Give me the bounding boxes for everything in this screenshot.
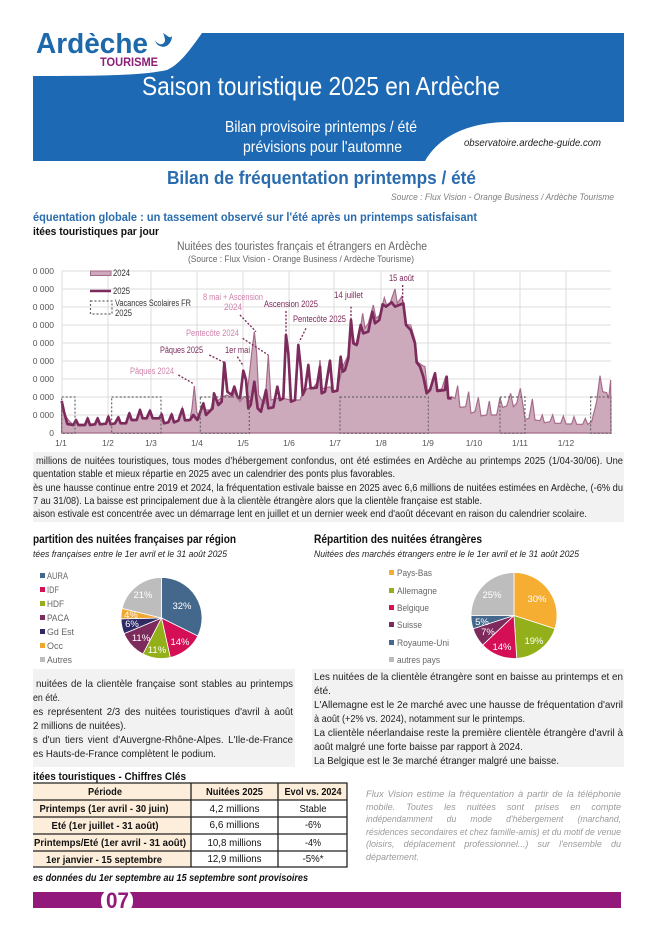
methodology note: (loisirs, déplacement professionnel...) sur l'ensemble du [366,839,622,850]
annotations: 8 mai + Ascension [203,292,263,302]
y axis labels: 40 000 [28,392,54,402]
chart legend: Vacances Scolaires FR [115,298,191,308]
x axis labels: 1/9 [422,438,434,448]
table: key figures: 1er janvier - 15 septembre [46,854,162,866]
website address: observatoire.ardeche-guide.com [464,137,601,149]
pie chart: foreign markets: 30% [527,594,547,605]
heading: partition des nuitées françaises par région [33,534,236,546]
panel: French clientele commentary: 2 millions de nuitées). [33,720,126,732]
chart legend: 2025 [113,286,130,296]
x axis labels: 1/12 [558,438,575,448]
table footnote: es données du 1er septembre au 15 septembre sont provisoires [33,873,308,884]
panel: foreign clientele commentary: été. [314,685,331,697]
table: key figures: Evol vs. 2024 [284,786,342,798]
legend: IDF [47,585,59,596]
heading: chiffres clés: itées touristiques - Chiffres Clés [33,771,186,783]
panel: foreign clientele commentary: L'Allemagne est le 2e marché avec une hausse de fréquentation d'avril [314,699,623,711]
annotations: Pentecôte 2024 [186,328,239,338]
methodology note: Flux Vision estime la fréquentation à partir de la téléphonie [366,789,621,800]
table: key figures: 12,9 millions [208,853,262,865]
footer bar with department number [33,892,621,908]
x axis labels: 1/5 [237,438,249,448]
panel: foreign clientele commentary: à août (+2% vs. 2024), notamment sur le printemps. [314,713,525,725]
legend: Allemagne [397,586,437,597]
pie chart: foreign markets: 25% [482,590,502,601]
panel: French clientele commentary: nuitées de la clientèle française sont stables au printemps [36,678,293,690]
x axis labels: 1/7 [329,438,341,448]
table: key figures: 6,6 millions [210,819,260,831]
line: 2025 [62,302,452,425]
methodology note [366,789,622,863]
legend [389,568,449,666]
annotations: Pâques 2025 [160,345,203,355]
chart subtitle: (Source : Flux Vision - Orange Business / Ardèche Tourisme) [188,254,414,264]
y axis labels: 0 [49,428,54,438]
table: key figures: -6% [305,819,321,831]
legend: Royaume-Uni [397,638,449,649]
logo: Ardèche Tourisme [36,33,172,66]
methodology note: résidences secondaires et chez famille-amis) et du motif de venue [366,827,621,838]
chart legend: 2024 [113,268,130,278]
panel: French clientele commentary: en été. [33,692,60,704]
legend: Autres [47,655,72,666]
table: key figures: -5%* [302,853,324,865]
y axis labels: 100 000 [23,338,54,348]
subtitle [225,119,417,156]
chart title: Nuitées des touristes français et étrangers en Ardèche [177,241,427,253]
y axis labels: 140 000 [23,302,54,312]
panel: foreign clientele commentary [312,669,624,767]
subheading: nuitées par jour: itées touristiques par jour [33,226,160,238]
legend: Pays-Bas [397,568,432,579]
pie chart: foreign markets [471,572,557,658]
panel: commentary on overall attendance: aison estivale est concentrée avec un démarrage lent en juillet et un dernier week end d'août décevant en raison du calendrier scolaire. [33,508,587,520]
x axis labels: 1/11 [512,438,528,448]
panel: foreign clientele commentary: La Belgique est le 3e marché étranger malgré une baisse. [314,755,559,767]
area: 2024 [62,289,611,433]
x axis labels: 1/4 [191,438,203,448]
panel: foreign overnight stays [314,534,580,666]
heading: Répartition des nuitées étrangères [314,534,482,546]
legend: Occ [47,641,63,652]
panel: commentary on overall attendance: quentation stable et mieux répartie en 2025 avec un calendrier des ponts plus favorables. [33,468,395,480]
pie chart: French regions: 4% [124,610,138,621]
logo: Ardèche Tourisme: Ardèche [36,28,148,60]
pie chart: French regions: 11% [132,633,151,644]
x axis labels: 1/10 [466,438,483,448]
source line: Source : Flux Vision - Orange Business / Ardèche Tourisme [391,192,614,203]
panel: French overnight stays by region [33,534,236,666]
chart legend [90,268,191,318]
table: key figures: Nuitées 2025 [206,786,263,798]
annotations [130,273,414,376]
caption: Nuitées des marchés étrangers entre le le 1er avril et le 31 août 2025 [314,549,580,560]
table: key figures: Printemps (1er avril - 30 juin) [40,803,168,815]
table: key figures: Période [88,786,122,798]
caption: tées françaises entre le 1er avril et le 31 août 2025 [33,549,228,560]
methodology note: mobile. Toutes les nuitées sont prises en compte [366,802,621,813]
y axis labels: 60 000 [28,374,54,384]
legend: PACA [47,613,70,624]
annotations: 2024 [224,302,242,312]
pie chart: French regions [121,578,202,658]
panel: foreign clientele commentary: août malgré une forte baisse par rapport à 2024. [314,741,523,753]
pie chart: French regions: 14% [170,637,190,648]
y axis labels: 20 000 [28,410,54,420]
pie chart: French regions: 32% [172,601,192,612]
annotation leader lines [178,285,403,384]
methodology note: département. [366,852,419,863]
subtitle: Bilan provisoire printemps / été [225,119,417,136]
table: key figures: Stable [300,803,327,815]
y axis labels: 160 000 [23,284,54,294]
y axis labels [33,268,54,436]
panel: French clientele commentary: es Hauts-de-France complètent le podium. [33,748,216,760]
logo: Ardèche Tourisme: TOURISME [100,57,158,69]
legend: autres pays [397,655,440,666]
panel: commentary on overall attendance: 7 au 31/08). La baisse est principalement due à la clientèle étrangère alors que la clientèle française est stable. [33,495,482,507]
pie chart: foreign markets: 14% [492,642,512,653]
chart legend: 2025 [115,308,132,318]
table: key figures: 4,2 millions [210,803,260,815]
x axis labels: 1/6 [283,438,295,448]
x axis labels: 1/1 [55,438,67,448]
legend: Gd Est [47,627,74,638]
annotations: 1er mai [225,345,250,355]
panel: commentary on overall attendance [33,452,624,522]
panel: foreign clientele commentary: La clientèle néerlandaise reste la première clientèle étrangère d'avril à [314,727,623,739]
legend: Belgique [397,603,429,614]
x axis labels [55,438,575,448]
x axis labels: 1/8 [375,438,387,448]
subtitle: prévisions pour l'automne [243,139,402,156]
panel: foreign clientele commentary: Les nuitées de la clientèle étrangère sont en baisse au printemps et en [314,671,623,683]
legend: AURA [47,571,69,582]
pie chart: foreign markets: 19% [524,636,544,647]
school holidays boxes [62,397,611,433]
table: key figures: -4% [305,837,321,849]
annotations: Pâques 2024 [130,366,174,376]
methodology note: indépendamment du mode d'hébergement (marchand, [366,814,621,825]
panel: French clientele commentary: s d'un tiers vient d'Auvergne-Rhône-Alpes. L'Ile-de-France [33,734,293,746]
legend [40,571,74,666]
table: key figures [33,783,347,867]
x axis labels: 1/2 [102,438,114,448]
x axis labels: 1/3 [145,438,157,448]
table: key figures: Printemps/Eté (1er avril - 31 août) [34,837,186,849]
pie chart: French regions: 21% [133,590,153,601]
annotations: 15 août [389,273,414,283]
annotations: Pentecôte 2025 [293,314,346,324]
legend: Suisse [397,620,422,631]
legend: HDF [47,599,64,610]
table: key figures: Eté (1er juillet - 31 août) [52,820,158,832]
pie chart: French regions: 11% [148,645,167,656]
title: Saison touristique 2025 en Ardèche [142,71,500,101]
data series [62,285,611,433]
annotations: Ascension 2025 [264,299,318,309]
panel: French clientele commentary: es représentent 2/3 des nuitées touristiques d'avril à août [33,706,293,718]
pie chart: foreign markets: 5% [475,617,489,628]
annotations: 14 juillet [334,290,363,300]
header banner [33,33,624,161]
section heading: Bilan de fréquentation printemps / été [167,168,476,188]
y axis labels: 180 000 [23,266,54,276]
pie chart: French regions: 6% [125,619,139,630]
footer bar with department number: 07 [106,888,129,913]
y axis labels: 120 000 [23,320,54,330]
panel: French clientele commentary [33,669,295,767]
table: key figures: 10,8 millions [208,837,262,849]
area chart: nuitées par jour [23,241,611,448]
subheading: fréquentation globale: équentation globale : un tassement observé sur l'été après un printemps satisfaisant [33,210,477,224]
pie chart: foreign markets: 7% [481,627,495,638]
y axis labels: 80 000 [28,356,54,366]
